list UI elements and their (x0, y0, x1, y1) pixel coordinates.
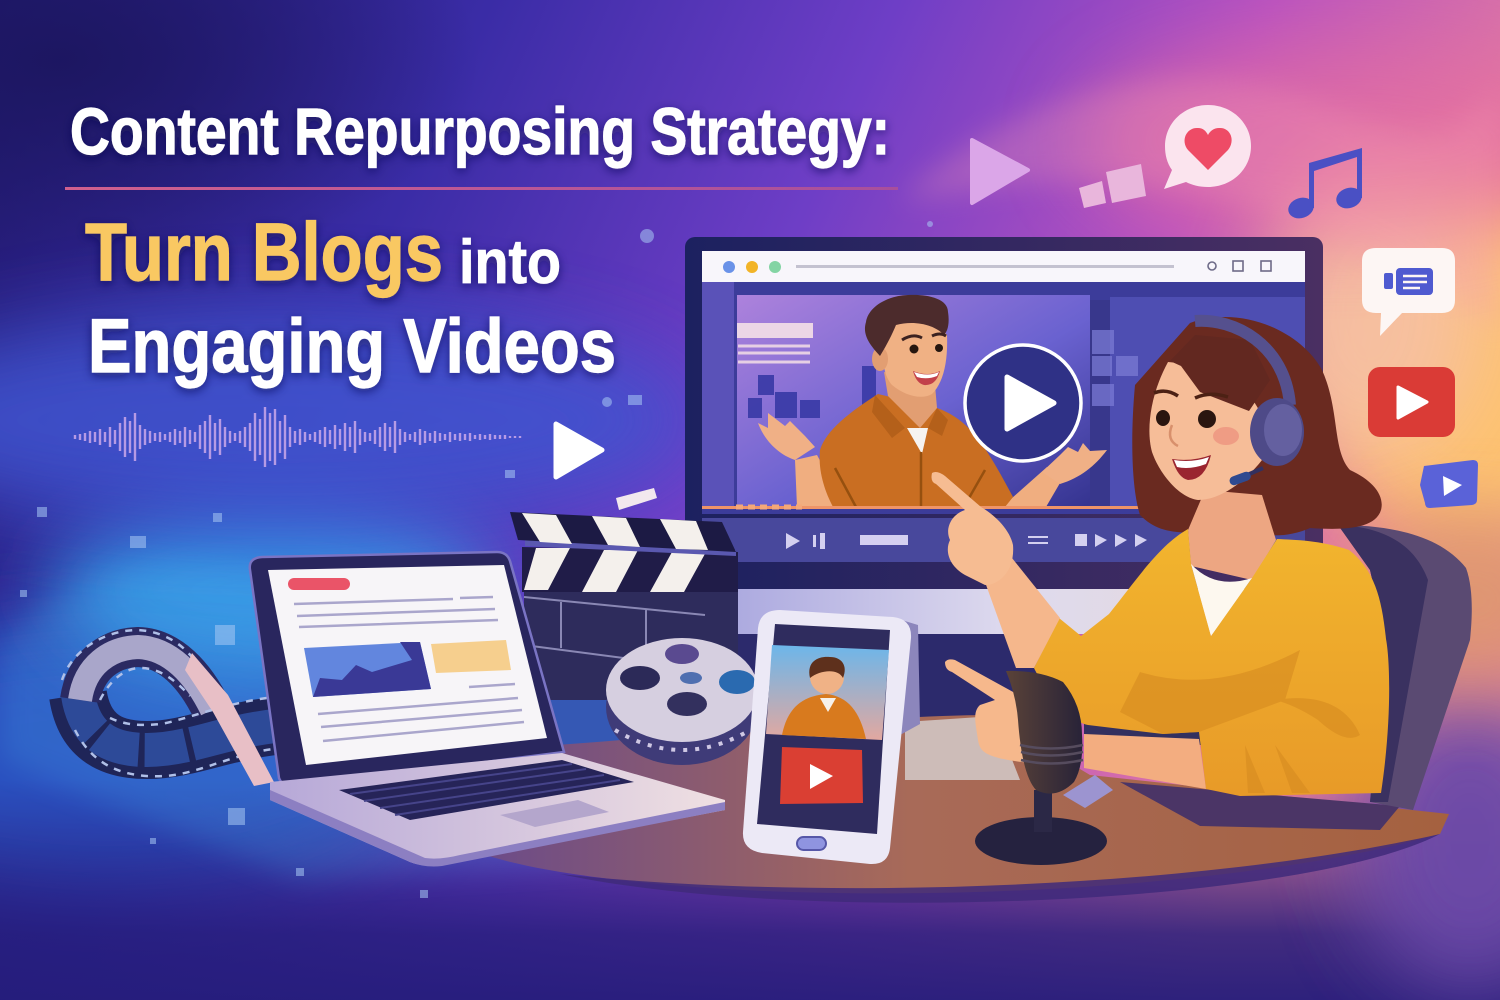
desk front shade (560, 834, 1440, 903)
torso underside (1084, 722, 1204, 745)
shirt (820, 394, 1013, 507)
pink ribbon (185, 653, 274, 786)
blog headline (288, 578, 350, 590)
smile (1172, 455, 1211, 480)
data particles (20, 221, 933, 898)
blog body text (318, 684, 524, 741)
presenter man (758, 295, 1107, 507)
icon: pale play (972, 140, 1028, 203)
controls background (702, 518, 1305, 562)
lower film band (78, 695, 285, 750)
icon: chat bubble (1362, 248, 1455, 336)
face (902, 334, 946, 385)
clapper hinge bar (525, 538, 736, 556)
progress bar (702, 506, 1172, 509)
title (65, 94, 898, 389)
laptop lid (250, 552, 564, 787)
icon: white play (556, 424, 602, 477)
upper film arc (80, 647, 212, 710)
phone body (743, 610, 911, 864)
phone red play (780, 747, 863, 804)
fringe (1170, 335, 1270, 411)
sweater (1034, 529, 1389, 796)
icon: music note (1286, 148, 1364, 222)
head (883, 318, 947, 397)
laptop screen (268, 565, 547, 765)
inner white (907, 428, 928, 454)
icon: red video play (1368, 367, 1455, 437)
monitor stand (700, 586, 1320, 634)
headset (1195, 321, 1304, 486)
video frame (702, 282, 1305, 514)
man left arm (795, 455, 845, 507)
desk (470, 715, 1449, 893)
man right hand (1042, 443, 1107, 484)
trackpad (500, 800, 609, 827)
confetti bar (616, 488, 657, 510)
neck (1188, 490, 1276, 580)
monitor frame (685, 237, 1323, 589)
desk shadow (1120, 782, 1400, 830)
pointing hand (932, 472, 1013, 585)
mic stem (1034, 790, 1052, 832)
browser bar (702, 251, 1305, 282)
keyboard (339, 760, 634, 820)
man left hand (758, 413, 815, 460)
laptop base edge (270, 790, 725, 866)
video content (702, 282, 1305, 508)
face (1149, 362, 1265, 500)
icon: blue video tag (1420, 460, 1478, 508)
phone home button (797, 837, 826, 850)
blog image (304, 642, 431, 697)
player controls (786, 533, 1147, 549)
blog lines (294, 597, 498, 627)
collar (872, 395, 948, 438)
hair (865, 295, 949, 356)
microphone (975, 671, 1107, 865)
blog callout (431, 640, 511, 673)
raised arm (985, 558, 1060, 668)
film strip (62, 630, 285, 786)
phone video (766, 645, 889, 740)
stand shadow (730, 634, 1060, 734)
ear (872, 347, 888, 371)
heading: line 1: Content Repurposing Strategy: (70, 94, 890, 168)
icon: heart bubble (1164, 105, 1251, 189)
forearm (1084, 734, 1206, 789)
heading: line 3: Engaging Videos (88, 304, 616, 389)
phone presenter (782, 657, 866, 739)
progress markers (736, 504, 802, 510)
laptop (250, 552, 725, 866)
clapperboard (510, 512, 738, 700)
title divider (65, 187, 898, 190)
inner shirt (1191, 564, 1252, 636)
clapper lower stripe (522, 547, 738, 592)
film perforations (62, 630, 285, 776)
mic base (975, 817, 1107, 865)
phone stand (895, 618, 920, 735)
back hair (1132, 317, 1382, 535)
teeth (1174, 457, 1209, 468)
neck (884, 372, 937, 428)
audio waveform (75, 407, 520, 467)
backdrop behind reel (530, 695, 740, 790)
small device (1063, 775, 1113, 808)
clapper body (524, 590, 738, 700)
icon: blue tag play (1443, 476, 1462, 496)
eyes and brows (1154, 391, 1239, 446)
heading: into: into (459, 228, 561, 297)
play button (965, 345, 1081, 461)
mic grille bands (1020, 745, 1083, 764)
desk light patch (905, 716, 1020, 780)
mic head (1006, 671, 1082, 794)
laptop base (270, 753, 725, 866)
lower hand (945, 659, 1040, 763)
sweater shading (1120, 650, 1360, 793)
chair (1338, 525, 1472, 810)
woman (932, 317, 1389, 796)
monitor (685, 237, 1323, 734)
phone screen (757, 624, 890, 834)
icon: small chat cards (1079, 164, 1146, 208)
phone (743, 610, 920, 864)
film reel (606, 638, 758, 765)
man right arm (1003, 467, 1068, 507)
heading: line 2: Turn Blogs (85, 207, 443, 298)
clapper top arm (510, 512, 736, 552)
